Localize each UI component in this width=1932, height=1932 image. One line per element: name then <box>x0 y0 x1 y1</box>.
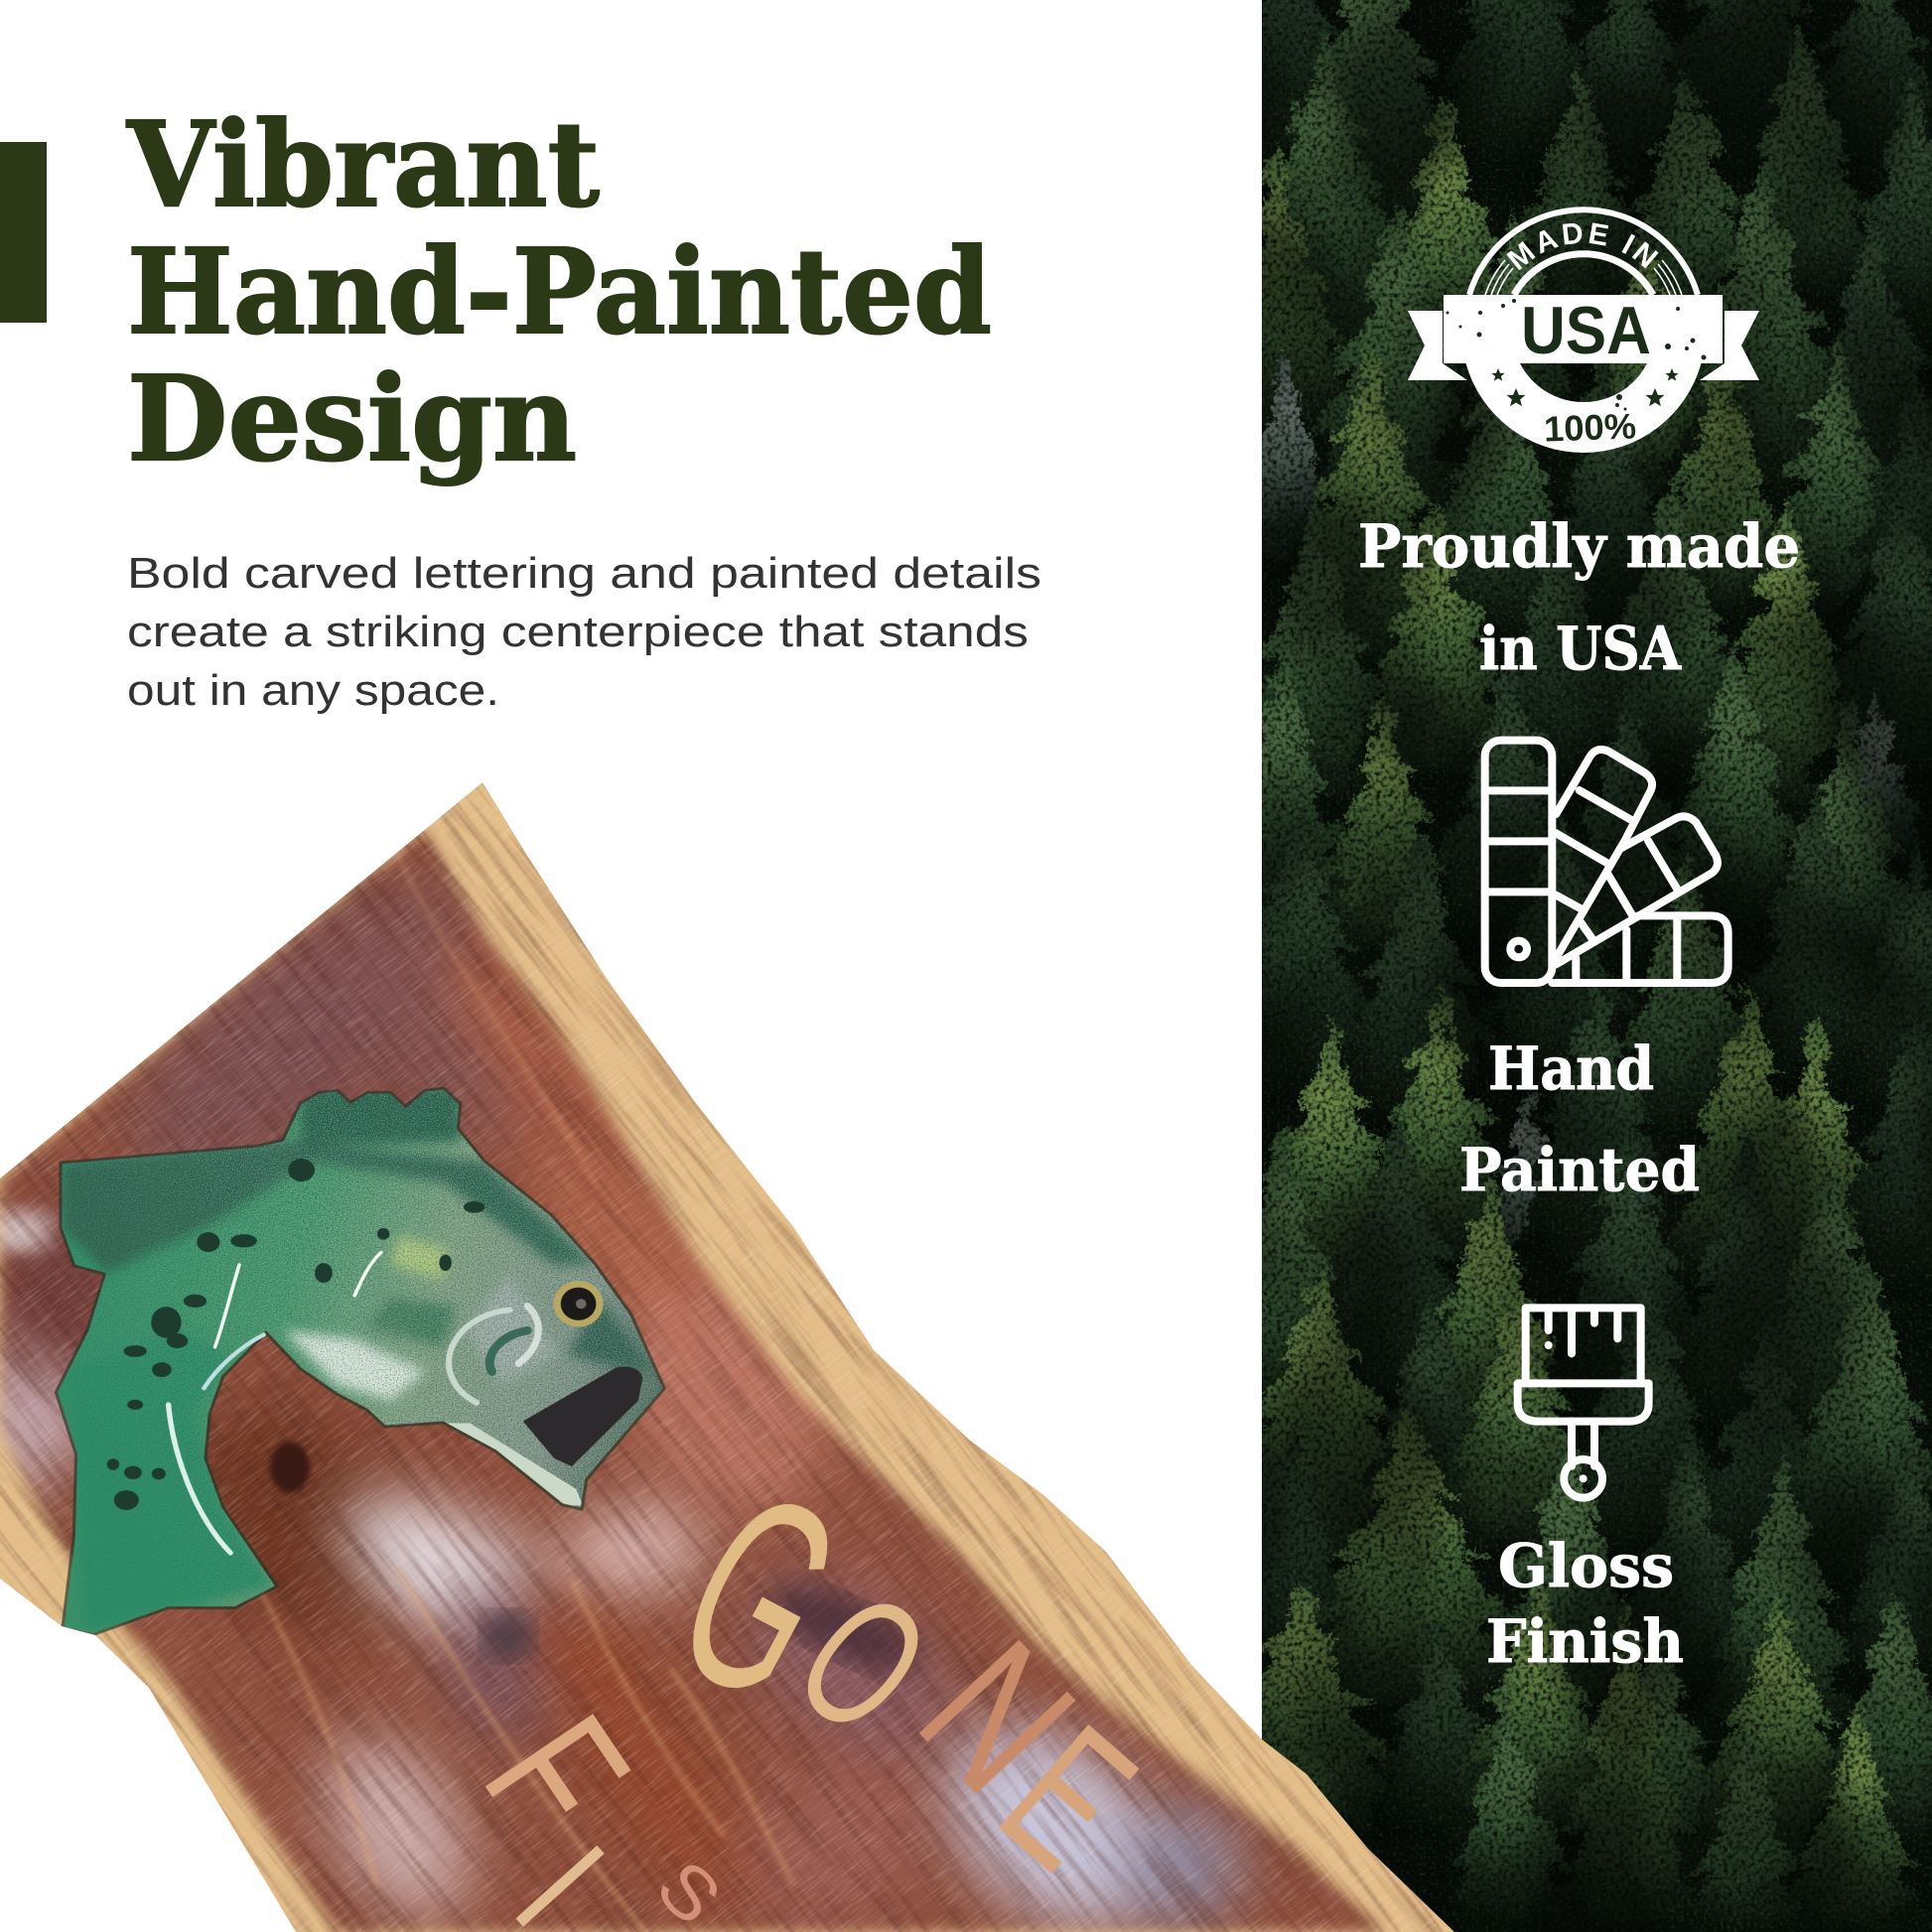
caption: proudly made in USA: in USA <box>1479 615 1682 684</box>
caption: proudly made in USA: Proudly made <box>1358 512 1800 582</box>
body text: out in any space. <box>127 666 499 715</box>
USA wording: USA <box>1521 293 1651 368</box>
icon: made in USA badge <box>1408 207 1759 453</box>
caption: gloss finish <box>1486 1532 1684 1677</box>
eye <box>554 1281 604 1326</box>
fish carving <box>45 1083 674 1643</box>
title <box>126 95 992 487</box>
distress speckles <box>1446 299 1706 411</box>
caption: hand painted <box>1459 1035 1700 1205</box>
100 percent wording: 100% <box>1543 405 1637 450</box>
caption: proudly made in USA <box>1358 512 1800 684</box>
title: Hand-Painted <box>127 222 992 360</box>
title: Design <box>127 349 577 487</box>
lower jaw <box>443 1424 583 1505</box>
accent bar <box>0 142 47 323</box>
icon: paint brush <box>1518 1308 1649 1498</box>
carved lettering: E <box>963 1685 1174 1909</box>
speckle <box>45 1083 674 1643</box>
carved lettering: F <box>445 1682 667 1870</box>
stars <box>1491 368 1679 406</box>
product photo: carved cedar plank <box>0 774 1469 1932</box>
icon: paint swatch fan <box>1485 741 1728 983</box>
caption: gloss finish: Gloss <box>1498 1532 1674 1601</box>
carved lettering <box>484 1504 1140 1927</box>
mouth <box>523 1367 642 1466</box>
lower seal <box>1465 363 1702 453</box>
body text <box>127 549 1041 715</box>
carved lettering: O <box>759 1553 966 1774</box>
wood grain texture <box>0 774 1469 1932</box>
caption: hand painted: Hand <box>1488 1035 1654 1104</box>
upper rings <box>1469 209 1698 295</box>
back shading and fins <box>62 1088 656 1631</box>
arched wording: MADE IN <box>1506 222 1658 270</box>
title: Vibrant <box>126 95 600 233</box>
heartwood colouring <box>0 794 1410 1932</box>
caption: gloss finish: Finish <box>1486 1607 1684 1677</box>
gill plates and highlights <box>169 1252 538 1553</box>
ribbon <box>1408 295 1759 380</box>
carved lettering: G <box>635 1431 884 1759</box>
body text: Bold carved lettering and painted details <box>127 549 1041 598</box>
panel: forest photo background <box>1175 0 1932 1932</box>
body text: create a striking centerpiece that stands <box>127 608 1029 656</box>
spots <box>107 1159 484 1510</box>
caption: hand painted: Painted <box>1459 1136 1700 1205</box>
carved lettering: N <box>880 1602 1115 1832</box>
dark knot <box>270 1442 310 1493</box>
light grain streaks <box>218 854 794 1932</box>
